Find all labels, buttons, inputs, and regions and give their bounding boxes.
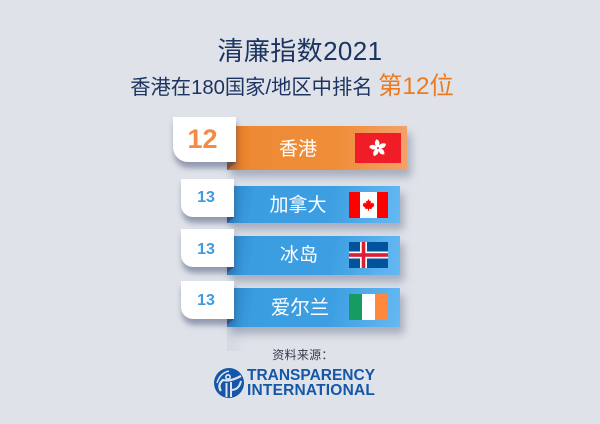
fold	[227, 162, 236, 170]
flag: Ireland	[349, 294, 388, 320]
fold	[227, 319, 234, 325]
blue bar	[227, 288, 400, 327]
name: Hong Kong: 香港	[279, 139, 317, 160]
blue bar	[227, 186, 400, 223]
name: Ireland: 爱尔兰	[271, 297, 329, 319]
row: Ireland	[178, 281, 408, 338]
title: 清廉指数2021	[217, 36, 383, 66]
logo wordmark: INTERNATIONAL	[247, 382, 375, 399]
blue bar	[227, 236, 400, 275]
rank tab 13	[181, 179, 234, 217]
rank tab 13	[181, 229, 234, 267]
rank tab 12	[173, 117, 236, 162]
flag: Canada	[349, 192, 388, 218]
rank tab 13: 13	[197, 189, 215, 206]
fold	[227, 267, 234, 273]
row: Hong Kong	[170, 117, 416, 182]
logo: Transparency International	[214, 367, 375, 399]
row: Canada	[178, 179, 408, 234]
subtitle: 香港在180国家/地区中排名 第12位	[130, 73, 454, 100]
rank tab 13: 13	[197, 241, 215, 258]
source label: 资料来源：	[272, 348, 334, 362]
rank tab 13	[181, 281, 234, 319]
name: Iceland: 冰岛	[280, 245, 318, 266]
logo icon	[214, 368, 244, 398]
fold	[227, 217, 234, 223]
orange bar	[227, 126, 407, 170]
flag: Hong Kong	[355, 133, 401, 163]
logo wordmark: TRANSPARENCY	[247, 367, 375, 384]
name: Canada: 加拿大	[269, 195, 326, 216]
row: Iceland	[178, 229, 408, 286]
rank tab 12: 12	[187, 124, 218, 154]
logo wordmark	[247, 367, 375, 399]
flag: Iceland	[349, 242, 388, 268]
rank tab 13: 13	[197, 292, 215, 309]
